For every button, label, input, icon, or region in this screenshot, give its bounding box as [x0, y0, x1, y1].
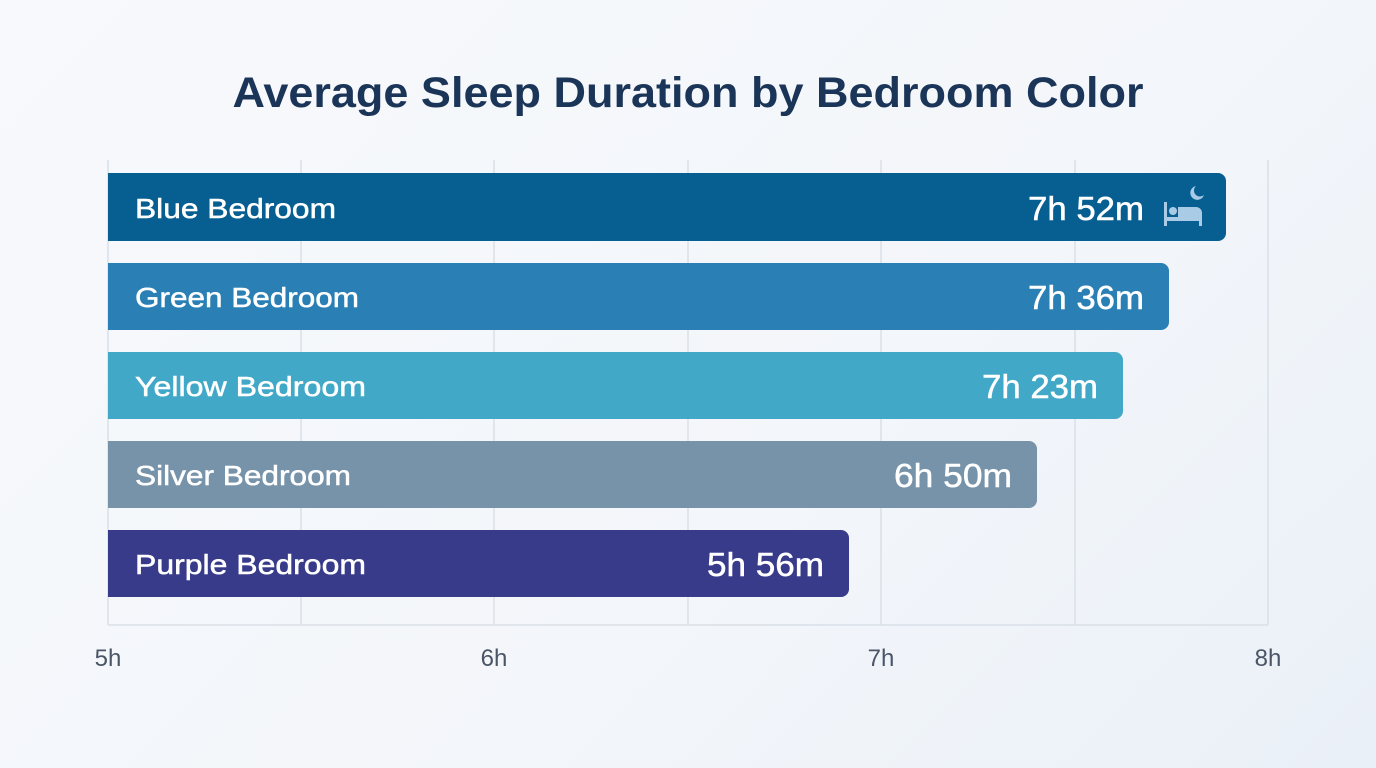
bar: silver bedroom: 6h 50m: [894, 457, 1012, 494]
x axis labels: 8h: [1255, 645, 1281, 672]
bar: green bedroom: Green Bedroom: [135, 282, 359, 313]
bar: yellow bedroom: Yellow Bedroom: [135, 371, 366, 402]
x axis labels: [95, 645, 1281, 672]
bar: yellow bedroom: [108, 352, 1123, 419]
bar: green bedroom: [108, 263, 1169, 330]
bar: purple bedroom: Purple Bedroom: [135, 549, 366, 580]
x axis labels: 5h: [95, 645, 121, 672]
bar: blue bedroom: [108, 173, 1226, 241]
title: Average Sleep Duration by Bedroom Color: [232, 69, 1144, 117]
x axis labels: 7h: [868, 645, 894, 672]
bar: yellow bedroom: 7h 23m: [982, 368, 1098, 405]
bar: green bedroom: 7h 36m: [1028, 279, 1144, 316]
bar: silver bedroom: Silver Bedroom: [135, 460, 351, 491]
x axis labels: 6h: [481, 645, 507, 672]
bar: blue bedroom: Blue Bedroom: [135, 193, 336, 224]
bar chart: [108, 173, 1226, 597]
bar: silver bedroom: [108, 441, 1037, 508]
bar: blue bedroom: 7h 52m: [1028, 190, 1144, 227]
bar: purple bedroom: 5h 56m: [707, 546, 824, 583]
icon: bed with moon: [1164, 186, 1204, 226]
bar: purple bedroom: [108, 530, 849, 597]
